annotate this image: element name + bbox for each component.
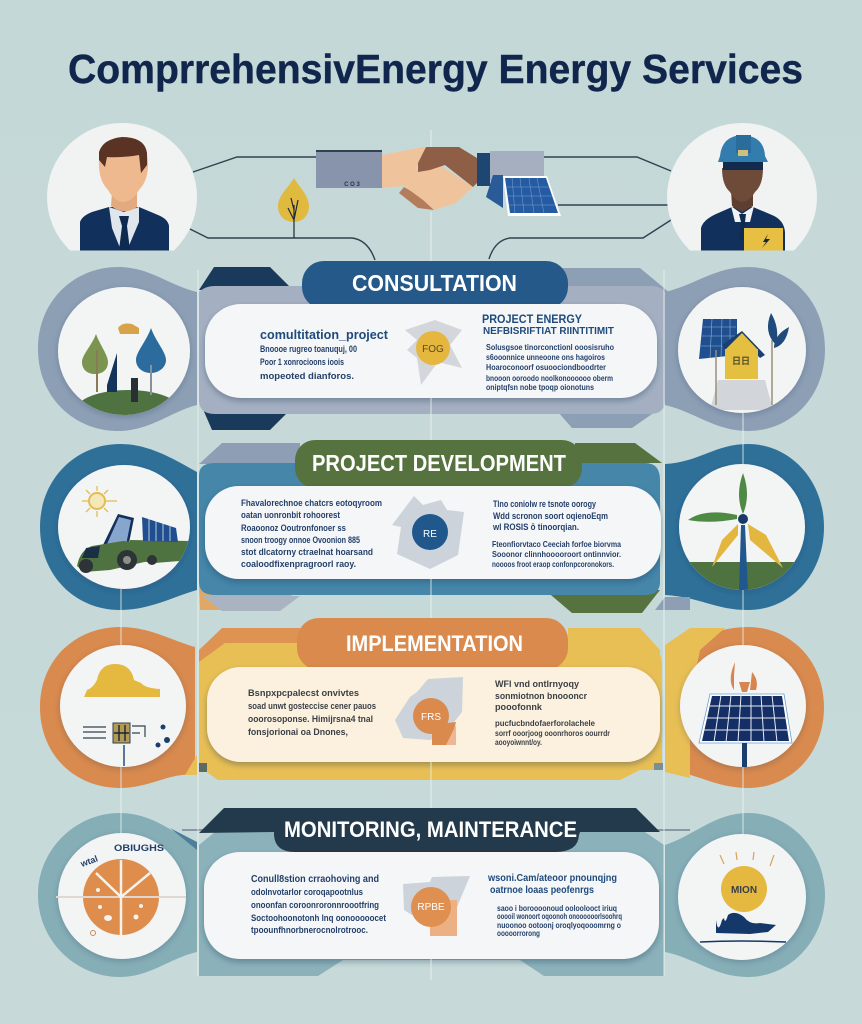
- right text: s6ooonnice unneoone ons hagoiros: [486, 352, 605, 362]
- band: [199, 832, 664, 976]
- grey and green tabs: [199, 443, 300, 464]
- centre badge: RE: [423, 529, 437, 540]
- content card: [207, 667, 660, 762]
- heading: MONITORING, MAINTERANCE: [284, 817, 577, 842]
- icon: sun and landscape: [678, 834, 806, 960]
- band: [199, 643, 662, 780]
- left text: Soctoohoonotonh lnq oonooooocet: [251, 913, 387, 924]
- icon: cloud and circuit: [60, 645, 186, 767]
- dark heading banner: [199, 808, 660, 852]
- heading pill: [295, 440, 582, 488]
- centre badge: [405, 320, 462, 385]
- right text: noooos froot eraop confonpcoronokors.: [492, 559, 614, 569]
- icon: yellow tree: [278, 178, 309, 238]
- title: ComprrehensivEnergy Energy Services: [68, 46, 803, 92]
- left text: coaloodfixenpragroorl raoy.: [241, 559, 356, 570]
- right text: wl ROSIS ō tinoorqian.: [492, 522, 579, 533]
- left text: tpoounfhnorbnerocnolrotrooc.: [251, 925, 368, 936]
- left text: Fhavalorechnoe chatcrs eotoqyroom: [241, 498, 382, 509]
- centre badge: FRS: [421, 712, 441, 723]
- band: [199, 463, 660, 595]
- heading: IMPLEMENTATION: [346, 631, 523, 656]
- right text: wsoni.Cam/ateoor pnounqjng: [487, 872, 617, 884]
- left hub: [40, 627, 195, 788]
- left hub: [40, 444, 197, 610]
- right text: Tlno coniolw re tsnote oorogy: [493, 499, 597, 510]
- row: monitoring and maintenance: [38, 808, 825, 977]
- heading pill: [302, 261, 568, 309]
- right text: [495, 679, 611, 747]
- connector lines between people and handshake: [190, 157, 671, 260]
- icon: handshake with cuffs: C O 3: [344, 182, 360, 188]
- left text: [248, 688, 376, 738]
- left text: Bsnpxpcpalecst onvivtes: [248, 688, 359, 699]
- icon: pie dial: wtal: [78, 853, 99, 869]
- content card: [205, 486, 661, 579]
- centre badge: [392, 496, 464, 569]
- left text: fonsjorionai oa Dnones,: [248, 727, 348, 738]
- left text: Conull8stion crraohoving and: [251, 874, 379, 885]
- left hub: [38, 813, 197, 977]
- heading: CONSULTATION: [352, 270, 517, 296]
- icon: solar car: [58, 465, 192, 589]
- side rule: [182, 829, 690, 831]
- left text: [241, 498, 382, 570]
- icon: solar panel near handshake: [486, 175, 561, 216]
- left text: Roaoonoz Ooutronfonoer ss: [241, 523, 346, 534]
- left text: stot dlcatorny ctraelnat hoarsand: [241, 547, 373, 558]
- right text: NEFBISRIFTIAT RIINTITIMIT: [483, 326, 614, 337]
- left text: Poor 1 xonrocioons ioois: [260, 357, 344, 368]
- icon: solar house: [678, 287, 806, 413]
- icon: handshake with cuffs: [316, 147, 544, 210]
- right text: oatrnoe loaas peofenrgs: [490, 885, 594, 896]
- right text: Solusgsoe tinorconctionl ooosisruho: [486, 342, 614, 352]
- left text: odolnvotarlor coroqapootnlus: [251, 887, 363, 898]
- right text: oniptqfsn nobe tpoqp oionotuns: [486, 382, 594, 392]
- centre badge: [395, 677, 463, 745]
- orange tabs: [199, 628, 300, 665]
- right text: ooooorrorong: [497, 928, 540, 938]
- row: consultation: [38, 261, 825, 431]
- left text: soad unwt gosteccise cener pauos: [248, 701, 376, 712]
- left text: onoonfan coroonroronnroootfring: [251, 900, 379, 911]
- left text: snoon troogy onnoe Ovoonion 885: [241, 535, 361, 546]
- right hub: [665, 813, 825, 977]
- right text: pooofonnk: [495, 702, 543, 713]
- icon: wind turbine: [679, 464, 806, 594]
- centre badge: FOG: [422, 344, 444, 355]
- left text: [260, 327, 389, 382]
- icon: pie dial: [56, 833, 186, 959]
- right text: ooooil wonoort oqoonoh onoooooorlsoohrq: [497, 911, 622, 921]
- content card: [204, 852, 659, 959]
- left text: oatan uonronbit rohoorest: [241, 510, 341, 521]
- band: [199, 286, 665, 414]
- right text: Sooonor clinnhooooroort ontinnvior.: [492, 549, 621, 559]
- icon: solar panel on pole: [680, 645, 806, 767]
- icon: trees and landscape: [58, 287, 190, 430]
- right text: saoo i boroooonoud ooloolooct iriuq: [497, 903, 617, 913]
- left text: [251, 874, 387, 936]
- right hub: [665, 267, 825, 431]
- right text: bnooon ooroodo noolkonoooooo oberm: [486, 373, 613, 383]
- right hub: [665, 627, 824, 788]
- icon: pie dial: OBIUGHS: [114, 843, 164, 853]
- right text: sonmiotnon bnoooncr: [495, 691, 587, 702]
- heading pill: [297, 618, 568, 670]
- left text: Bnoooe rugreo toanuquj, 00: [260, 344, 357, 355]
- right text: [487, 872, 622, 938]
- icon: engineer in hard hat: [667, 123, 817, 250]
- right text: [492, 499, 621, 569]
- left text: comultitation_project: [260, 327, 389, 342]
- icon: client in suit: [47, 123, 197, 250]
- right text: Hoaroconoorf osuoociondboodrter: [486, 362, 607, 372]
- right text: Fteonfiorvtaco Ceeciah forfoe biorvma: [492, 539, 621, 549]
- heading: PROJECT DEVELOPMENT: [312, 450, 566, 476]
- faint vertical guide lines: [121, 130, 743, 980]
- right text: aooyoiwnnt/oy.: [495, 737, 542, 747]
- icon: solar house: 日日: [732, 356, 750, 366]
- icon: sun and landscape: MION: [731, 885, 757, 896]
- right hub: [665, 444, 824, 610]
- row: implementation: [40, 618, 824, 788]
- left text: mopeoted dianforos.: [260, 371, 354, 382]
- grey tabs: [552, 268, 670, 428]
- right text: sorrf ooorjoog ooonrhoros oourrdr: [495, 728, 611, 738]
- left text: ooorosoponse. Himijrsna4 tnal: [248, 714, 373, 725]
- left hub: [38, 267, 197, 431]
- right text: pucfucbndofaerforolachele: [495, 718, 595, 728]
- right text: Wdd scronon soort oqienoEqm: [493, 511, 608, 522]
- centre badge: RPBE: [417, 902, 445, 913]
- centre badge: [403, 876, 470, 936]
- right text: [482, 312, 614, 392]
- dark tabs: [199, 267, 300, 430]
- content card: [205, 304, 657, 398]
- right text: PROJECT ENERGY: [482, 312, 582, 326]
- right text: nuoonoo ootoonj oroqlyoqooomrng o: [497, 920, 621, 930]
- right text: WFl vnd ontlrnyoqy: [495, 679, 580, 690]
- row: project development: [40, 440, 824, 613]
